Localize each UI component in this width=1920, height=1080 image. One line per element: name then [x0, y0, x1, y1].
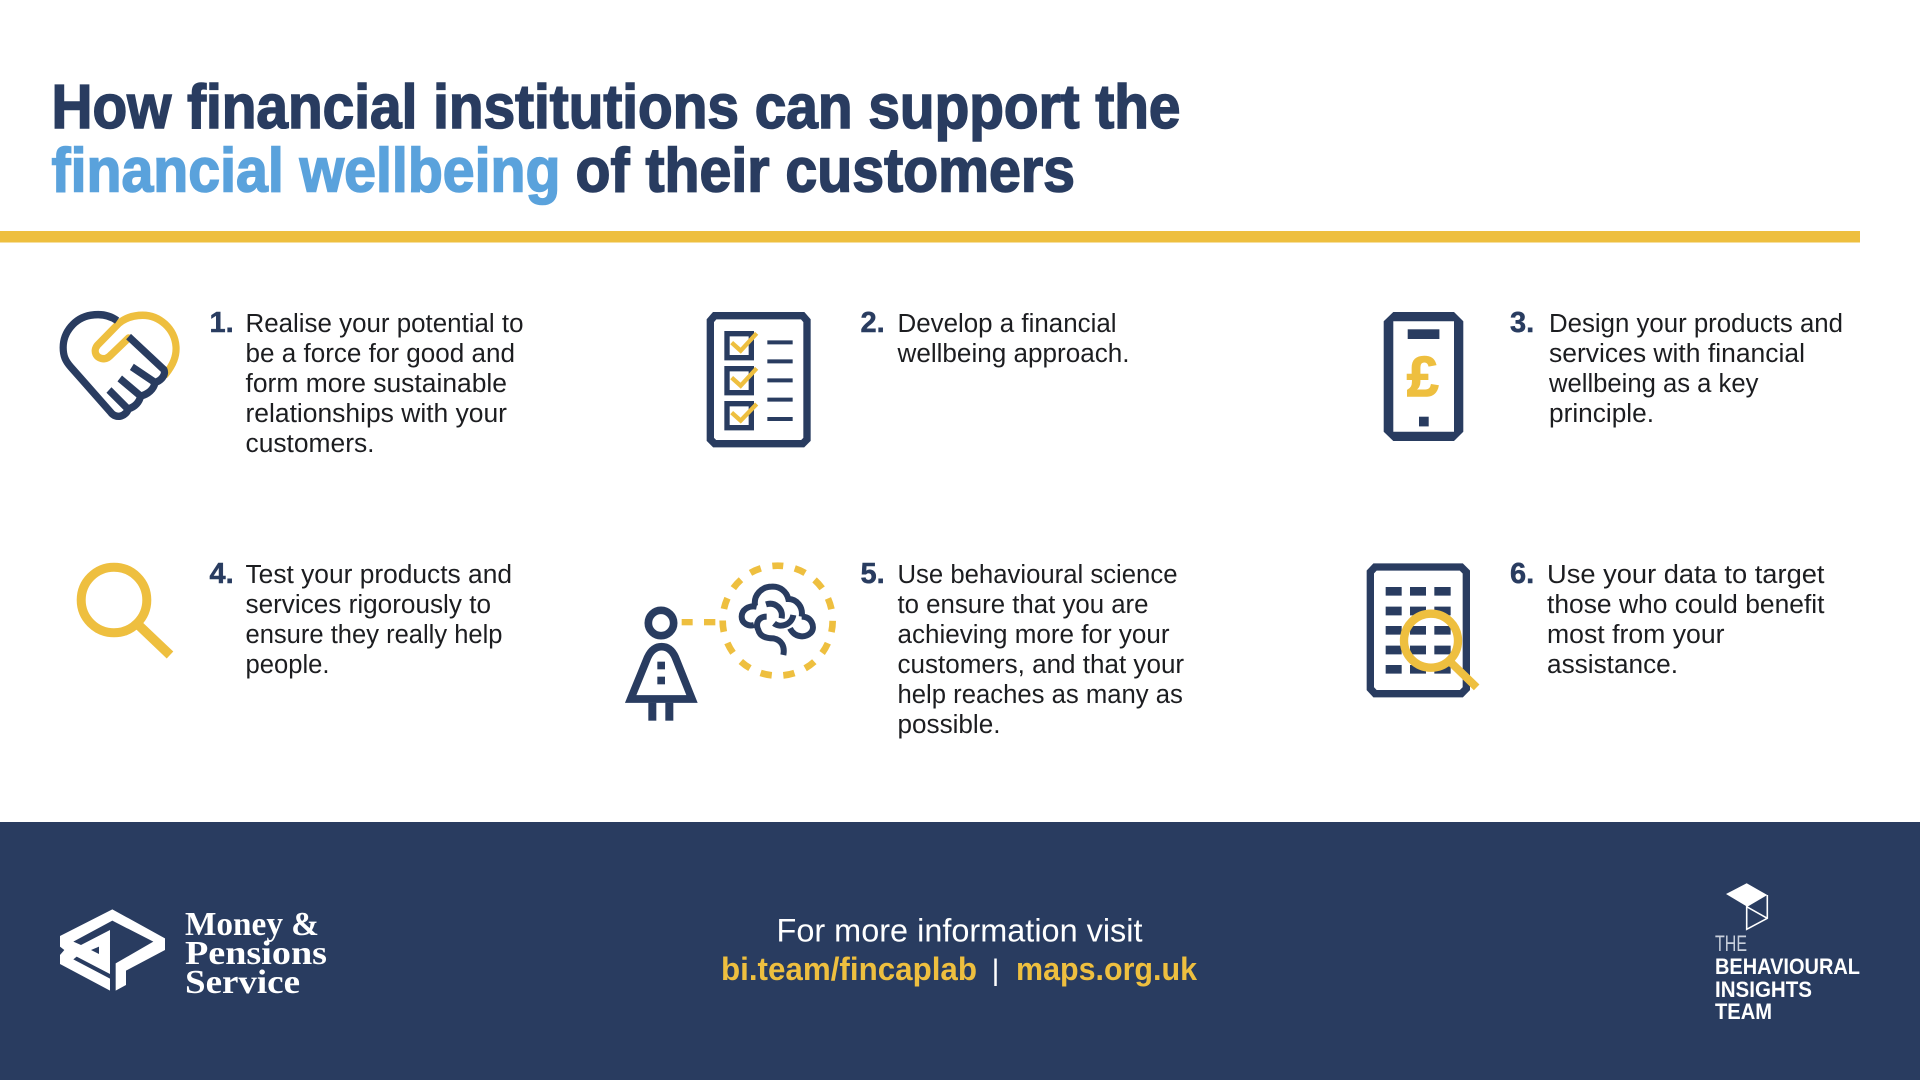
step text: Develop a financial — [898, 310, 1116, 338]
logo: Money and Pensions Service — [60, 906, 327, 1001]
step text — [246, 561, 512, 679]
panel: step 1 — [63, 307, 524, 458]
footer call to action: bi.team/fincaplab — [721, 951, 977, 987]
logo wordmark: THE — [1715, 931, 1747, 956]
footer call to action: For more information visit — [776, 912, 1143, 948]
step text: those who could benefit — [1547, 591, 1824, 619]
step number: 4. — [210, 558, 234, 590]
panel: step 5 — [631, 558, 1185, 739]
step number: 5. — [860, 558, 885, 590]
step text: customers, and that your — [898, 651, 1185, 679]
icon: magnifying glass — [81, 567, 170, 655]
footer call to action: maps.org.uk — [1016, 951, 1197, 987]
icon: data table with magnifier — [1370, 567, 1477, 694]
step text — [246, 310, 524, 458]
icon: mobile phone with pound sign — [1384, 312, 1463, 441]
step number: 1. — [210, 307, 234, 339]
icon: handshake heart — [63, 315, 176, 416]
logo wordmark — [185, 906, 327, 1001]
step text: most from your — [1547, 621, 1725, 649]
logo wordmark: Service — [185, 964, 300, 1001]
title: How financial institutions can support the — [52, 73, 1180, 142]
panel: step 3 — [1384, 307, 1843, 441]
step text: customers. — [246, 430, 374, 458]
title: of their customers — [576, 136, 1075, 206]
step text: achieving more for your — [898, 621, 1170, 649]
step text: people. — [246, 651, 330, 679]
step text: Design your products and — [1549, 310, 1843, 338]
title: financial wellbeing — [52, 136, 560, 206]
icon: MaPS mark — [60, 909, 165, 995]
step text — [896, 310, 1130, 368]
logo wordmark: INSIGHTS — [1715, 977, 1812, 1002]
step text: relationships with your — [246, 400, 508, 428]
footer call to action: | — [992, 954, 999, 987]
step text — [1547, 561, 1824, 679]
step text: Use your data to target — [1547, 561, 1824, 589]
footer background — [0, 822, 1920, 1080]
panel: step 6 — [1370, 558, 1824, 694]
step number: 3. — [1510, 307, 1534, 339]
step text: possible. — [898, 711, 1000, 739]
footer call to action — [721, 912, 1197, 987]
icon: checklist — [710, 316, 807, 444]
step text: wellbeing as a key — [1548, 370, 1759, 398]
step text: ensure they really help — [246, 621, 502, 649]
logo wordmark: Pensions — [185, 935, 327, 972]
logo wordmark: TEAM — [1715, 999, 1772, 1024]
logo: The Behavioural Insights Team — [1715, 883, 1860, 1024]
step number: 6. — [1510, 558, 1534, 590]
step text: services rigorously to — [246, 591, 491, 619]
step text: Realise your potential to — [246, 310, 524, 338]
step text: services with financial — [1549, 340, 1805, 368]
icon: BIT cube — [1726, 883, 1767, 929]
yellow header rule — [0, 231, 1860, 242]
step text: assistance. — [1547, 651, 1678, 679]
step text: Test your products and — [246, 561, 512, 589]
step text: form more sustainable — [246, 370, 507, 398]
panel: step 4 — [81, 558, 512, 679]
step text: principle. — [1549, 400, 1654, 428]
logo wordmark — [1715, 931, 1860, 1024]
step text: wellbeing approach. — [896, 340, 1130, 368]
step number: 2. — [860, 307, 885, 339]
step text: Use behavioural science — [898, 561, 1178, 589]
logo wordmark: Money & — [185, 906, 319, 943]
panel: step 2 — [710, 307, 1130, 444]
step text — [1548, 310, 1843, 428]
title — [52, 73, 1180, 206]
icon: person thinking with brain — [631, 566, 833, 721]
logo wordmark: BEHAVIOURAL — [1715, 954, 1860, 979]
panel: footer — [0, 822, 1920, 1080]
icon: mobile phone with pound sign: £ — [1407, 345, 1439, 409]
step text: to ensure that you are — [898, 591, 1148, 619]
step text — [898, 561, 1185, 739]
step text: help reaches as many as — [898, 681, 1183, 709]
step text: be a force for good and — [246, 340, 515, 368]
